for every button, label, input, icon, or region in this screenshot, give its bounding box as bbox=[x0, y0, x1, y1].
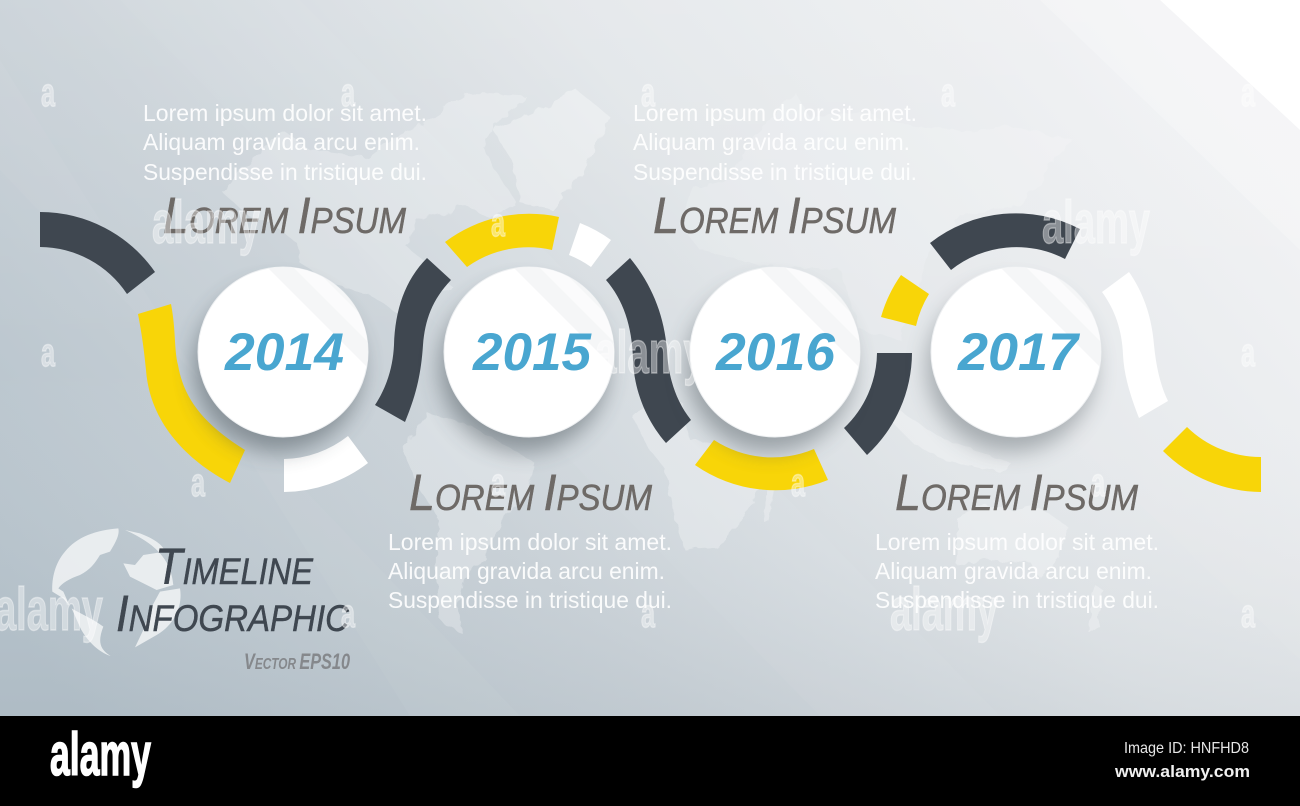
body text: Aliquam gravida arcu enim. bbox=[633, 129, 910, 155]
heading: LOREM IPSUM bbox=[895, 464, 1138, 521]
subtitle: VECTOR EPS10 bbox=[244, 649, 351, 674]
watermarks: alamy bbox=[152, 189, 260, 256]
website: www.alamy.com bbox=[1114, 762, 1250, 781]
watermarks: a bbox=[41, 331, 55, 375]
watermarks: a bbox=[1241, 592, 1255, 636]
watermarks: a bbox=[1091, 461, 1105, 505]
arc: white 2017 bbox=[1102, 272, 1168, 418]
watermarks bbox=[0, 71, 1255, 643]
arc: dark start bbox=[40, 212, 155, 294]
milestone: 2017 bbox=[927, 262, 1105, 452]
text block: 2014 bbox=[143, 100, 427, 244]
arc: yellow 2015 bbox=[445, 214, 559, 267]
watermarks: a bbox=[1241, 71, 1255, 115]
map: North America bbox=[223, 93, 527, 315]
text block: 2015 bbox=[388, 464, 672, 613]
body text: Lorem ipsum dolor sit amet. bbox=[633, 100, 917, 126]
body text: Lorem ipsum dolor sit amet. bbox=[875, 529, 1159, 555]
map: Australia bbox=[957, 505, 1068, 578]
watermarks: a bbox=[191, 461, 205, 505]
watermarks: alamy bbox=[595, 319, 705, 386]
year: 2016: 2016 bbox=[715, 323, 836, 382]
map: Greenland bbox=[493, 90, 610, 210]
watermarks: a bbox=[941, 71, 955, 115]
body text: Suspendisse in tristique dui. bbox=[875, 587, 1159, 613]
watermarks: a bbox=[1241, 331, 1255, 375]
body text: Aliquam gravida arcu enim. bbox=[875, 558, 1152, 584]
map: Madagascar bbox=[762, 490, 776, 522]
watermarks: a bbox=[341, 592, 355, 636]
world map bbox=[223, 90, 1103, 633]
heading: LOREM IPSUM bbox=[409, 464, 652, 521]
body text: Lorem ipsum dolor sit amet. bbox=[388, 529, 672, 555]
watermarks: a bbox=[491, 461, 505, 505]
year: 2015: 2015 bbox=[472, 323, 593, 382]
body text: Suspendisse in tristique dui. bbox=[633, 159, 917, 185]
arc: yellow end bbox=[1163, 427, 1261, 492]
body text: Suspendisse in tristique dui. bbox=[388, 587, 672, 613]
arc: white 2014 bbox=[284, 436, 368, 492]
arc: yellow 2017 bbox=[881, 275, 929, 326]
image id: Image ID: HNFHD8 bbox=[1124, 740, 1249, 757]
map: Africa bbox=[632, 400, 777, 550]
year: 2017: 2017 bbox=[957, 323, 1081, 382]
body text: Lorem ipsum dolor sit amet. bbox=[143, 100, 427, 126]
watermarks: alamy bbox=[1042, 189, 1150, 256]
body text: Aliquam gravida arcu enim. bbox=[388, 558, 665, 584]
arc: dark 2016 bbox=[844, 353, 912, 455]
timeline arc segments bbox=[40, 212, 1261, 492]
map: New Zealand bbox=[1088, 585, 1103, 632]
alamy logo: alamy bbox=[50, 721, 151, 788]
title line 2: INFOGRAPHIC bbox=[116, 585, 349, 642]
arc: dark 2017 bbox=[930, 213, 1080, 270]
text block: 2017 bbox=[875, 464, 1159, 613]
arc: yellow 2014 bbox=[138, 304, 245, 483]
arc: dark 2015 to 2016 bbox=[606, 258, 691, 443]
milestone: 2016 bbox=[686, 262, 864, 452]
watermarks: a bbox=[41, 71, 55, 115]
heading: LOREM IPSUM bbox=[163, 187, 406, 244]
watermarks: a bbox=[791, 461, 805, 505]
map: South America bbox=[402, 413, 535, 633]
watermarks: a bbox=[491, 201, 505, 245]
watermarks: alamy bbox=[890, 576, 998, 643]
arc: yellow 2016 bbox=[695, 440, 828, 490]
icon: globe bbox=[52, 528, 181, 656]
map: Southeast Asia bbox=[880, 395, 1010, 472]
year: 2014: 2014 bbox=[224, 323, 344, 382]
text block: 2016 bbox=[633, 100, 917, 244]
map: Europe and Asia bbox=[680, 92, 1073, 340]
watermarks: a bbox=[341, 71, 355, 115]
milestone: 2015 bbox=[440, 262, 618, 452]
body text: Suspendisse in tristique dui. bbox=[143, 159, 427, 185]
heading: LOREM IPSUM bbox=[653, 187, 896, 244]
watermarks: a bbox=[641, 71, 655, 115]
body text: Aliquam gravida arcu enim. bbox=[143, 129, 420, 155]
arc: white 2015 bbox=[569, 223, 611, 267]
arc: dark 2014 to 2015 bbox=[375, 258, 451, 422]
watermarks: alamy bbox=[0, 576, 103, 643]
milestone: 2014 bbox=[194, 262, 372, 452]
footer bar bbox=[0, 716, 1300, 806]
title line 1: TIMELINE bbox=[155, 538, 314, 595]
watermarks: a bbox=[641, 592, 655, 636]
main title bbox=[116, 538, 351, 674]
